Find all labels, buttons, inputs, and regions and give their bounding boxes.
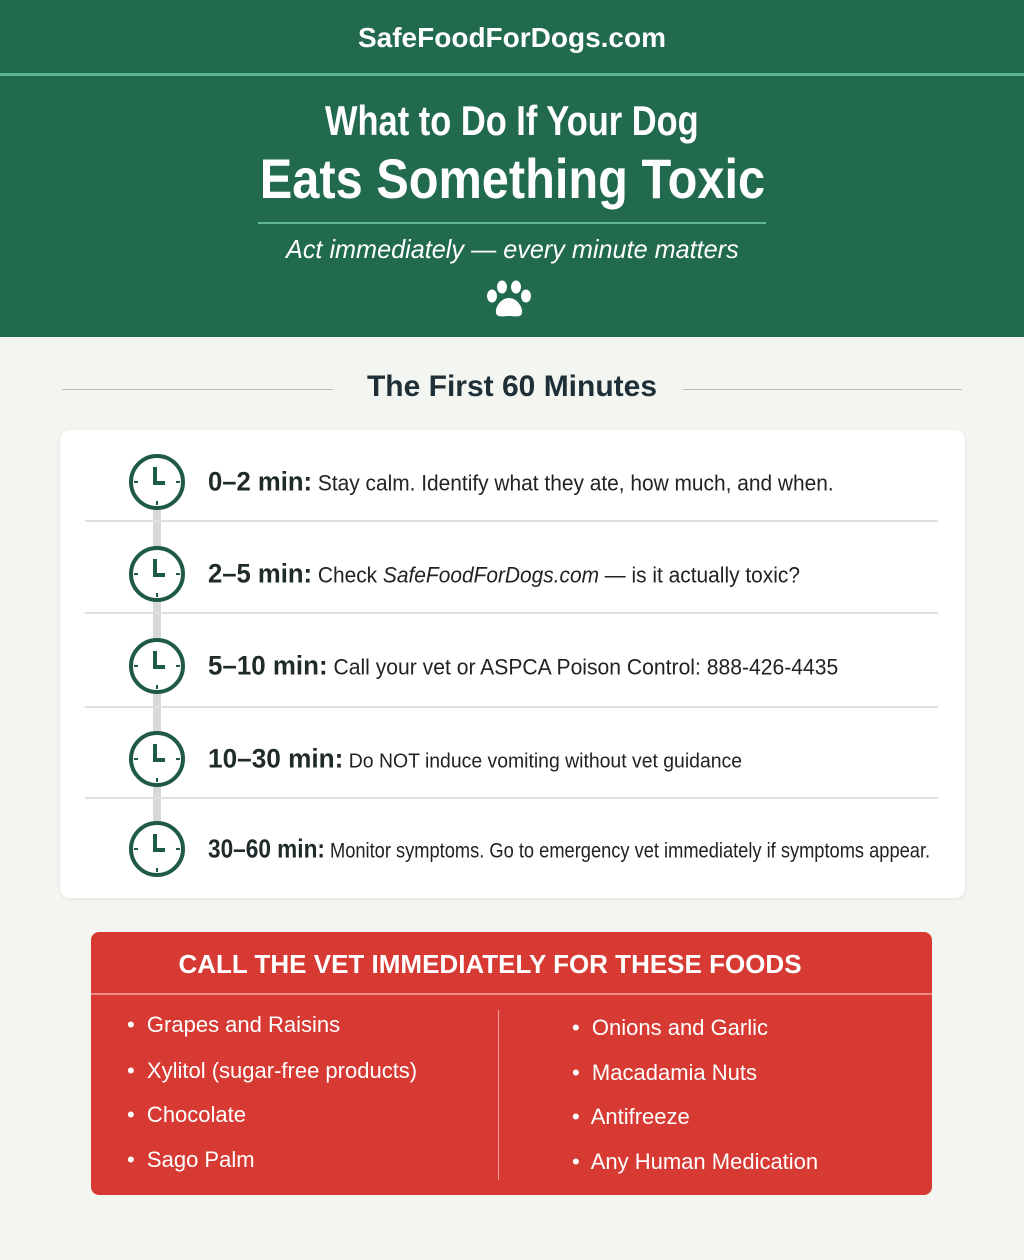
step 0-2 (129, 454, 834, 510)
panel: call the vet foods (91, 932, 932, 1195)
title: What to Do If Your Dog (325, 97, 699, 144)
icon: paw (487, 280, 531, 316)
list left: • Chocolate (127, 1102, 246, 1127)
list left: • Grapes and Raisins (127, 1012, 340, 1037)
red box heading: CALL THE VET IMMEDIATELY FOR THESE FOODS (178, 949, 802, 979)
site name: SafeFoodForDogs.com (358, 22, 666, 53)
subtitle: Act immediately — every minute matters (286, 234, 738, 264)
title (259, 97, 765, 210)
panel: timeline (60, 430, 965, 898)
title: Eats Something Toxic (259, 147, 765, 210)
step 2-5 (129, 546, 800, 602)
list left: • Xylitol (sugar-free products) (127, 1058, 417, 1083)
step 10-30 (129, 731, 742, 787)
step 30-60: 30–60 min: Monitor symptoms. Go to emergency vet immediately if symptoms appear. (208, 834, 930, 864)
step 5-10: 5–10 min: Call your vet or ASPCA Poison Control: 888-426-4435 (208, 650, 838, 680)
step 0-2: 0–2 min: Stay calm. Identify what they ate, how much, and when. (208, 466, 834, 496)
step 5-10 (129, 638, 838, 694)
list left: • Sago Palm (127, 1147, 255, 1172)
step 2-5: 2–5 min: Check SafeFoodForDogs.com — is it actually toxic? (208, 558, 800, 588)
list right: • Any Human Medication (572, 1149, 818, 1174)
section heading: The First 60 Minutes (367, 370, 657, 403)
step 10-30: 10–30 min: Do NOT induce vomiting without vet guidance (208, 744, 742, 774)
list left (127, 1012, 417, 1172)
header banner (0, 0, 1024, 337)
list right: • Onions and Garlic (572, 1015, 768, 1040)
list right (572, 1015, 818, 1174)
list right: • Antifreeze (572, 1104, 690, 1129)
list right: • Macadamia Nuts (572, 1060, 757, 1085)
step 30-60 (129, 821, 930, 877)
